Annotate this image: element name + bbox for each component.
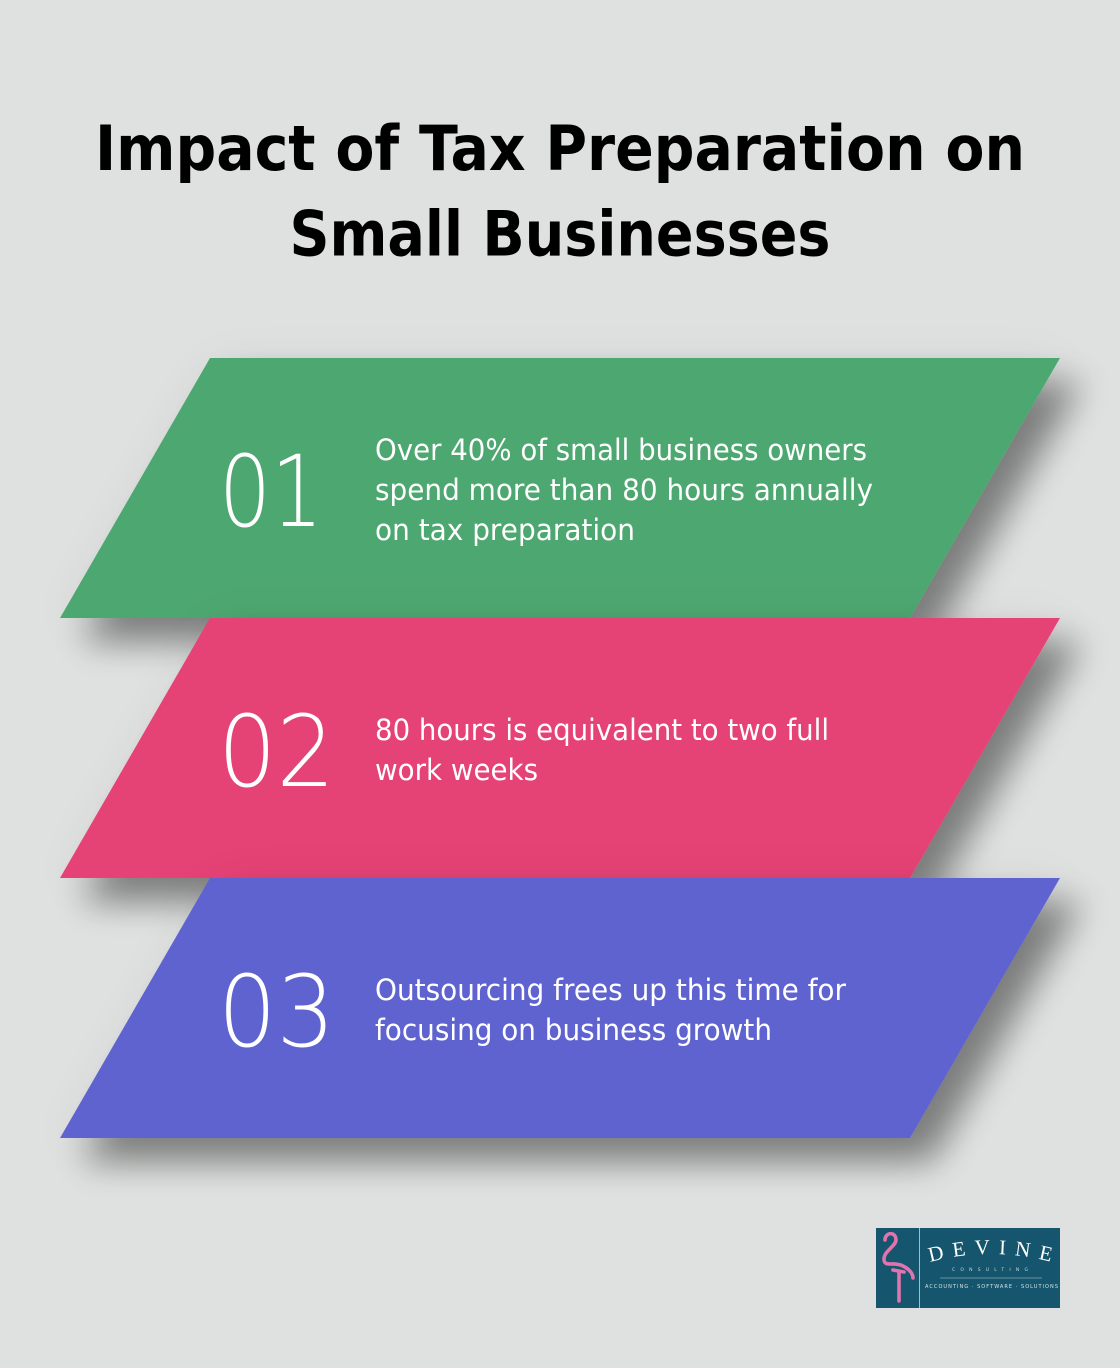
blue parallelogram (60, 878, 1060, 1138)
pink parallelogram (60, 618, 1060, 878)
text: step 1: spend more than 80 hours annually (375, 473, 873, 507)
logo tagline: ACCOUNTING · SOFTWARE · SOLUTIONS (925, 1284, 1058, 1290)
number 01: 01 (219, 435, 323, 550)
text: step 3: focusing on business growth (375, 1013, 772, 1047)
text: step 3 (375, 973, 846, 1047)
title: Impact of Tax Preparation on (95, 112, 1025, 185)
number 03: 03 (218, 955, 335, 1070)
logo: Devine Consulting (876, 1228, 1060, 1308)
text: step 1: on tax preparation (375, 513, 635, 547)
icon: flamingo (884, 1234, 913, 1301)
text: step 2: 80 hours is equivalent to two full (375, 713, 829, 747)
title: Small Businesses (290, 198, 830, 270)
panel: step 3 (60, 878, 1060, 1138)
panel: step 2 (60, 618, 1060, 878)
logo wordmark: DEVINE (928, 1240, 1052, 1262)
title (95, 112, 1025, 270)
number 02: 02 (218, 695, 335, 810)
text: step 1: Over 40% of small business owners (375, 433, 867, 467)
text: step 2 (375, 713, 829, 787)
text: step 3: Outsourcing frees up this time for (375, 973, 846, 1007)
text: step 1 (375, 433, 873, 547)
panel: step 1 (60, 358, 1060, 618)
text: step 2: work weeks (375, 753, 538, 787)
green parallelogram (60, 358, 1060, 618)
logo subtitle: CONSULTING (952, 1267, 1028, 1273)
